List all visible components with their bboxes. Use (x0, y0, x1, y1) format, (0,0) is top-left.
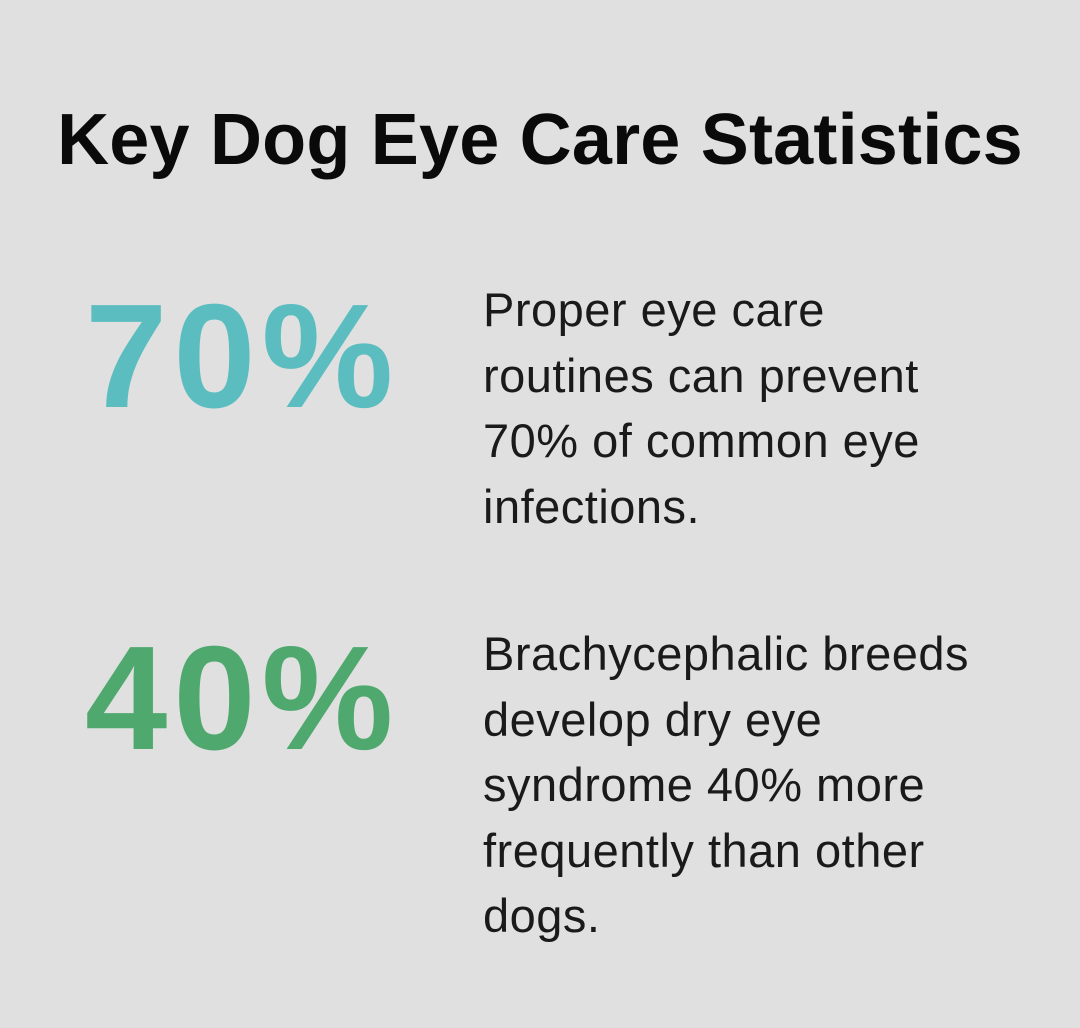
text: 70% description: Proper eye care (483, 283, 825, 336)
stat: 40%: 40% (85, 616, 399, 781)
title: Key Dog Eye Care Statistics (57, 100, 1023, 180)
text: 40% description: Brachycephalic breeds (483, 627, 969, 680)
text: 40% description (483, 627, 969, 942)
stat: 70%: 70% (85, 274, 399, 439)
text: 40% description: frequently than other (483, 824, 925, 876)
text: 40% description: dogs. (483, 889, 600, 942)
text: 70% description: 70% of common eye (483, 414, 920, 467)
text: 70% description (483, 283, 920, 532)
text: 40% description: syndrome 40% more (483, 758, 925, 811)
text: 40% description: develop dry eye (483, 692, 822, 746)
text: 70% description: routines can prevent (483, 348, 919, 402)
text: 70% description: infections. (483, 480, 700, 532)
